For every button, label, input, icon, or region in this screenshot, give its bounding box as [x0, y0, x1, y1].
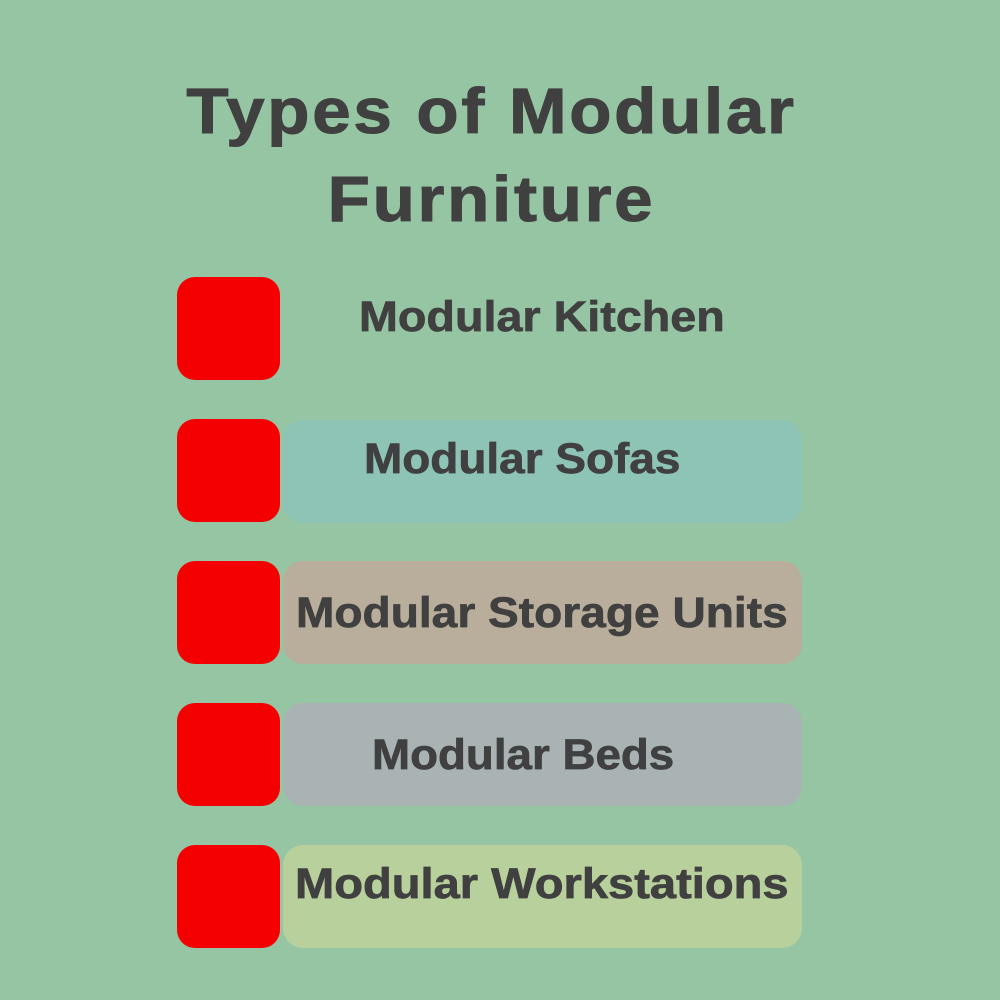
title: Types of Modular [186, 75, 797, 147]
row: Modular Workstations [177, 845, 802, 948]
row: Modular Sofas [177, 419, 802, 523]
row: Modular Beds [177, 703, 802, 806]
icon: red square 5 [177, 845, 280, 948]
row: Modular Kitchen [177, 277, 725, 380]
row: Modular Storage Units [177, 561, 802, 664]
bar: light green [283, 845, 802, 948]
bar: grey [283, 703, 802, 806]
label: Modular Beds: Modular Beds [372, 731, 674, 779]
bar: tan [283, 561, 802, 664]
label: Modular Kitchen: Modular Kitchen [359, 293, 725, 341]
title [186, 75, 797, 235]
label: Modular Storage Units: Modular Storage Units [296, 589, 788, 637]
icon: red square 1 [177, 277, 280, 380]
icon: red square 2 [177, 419, 280, 522]
label: Modular Sofas: Modular Sofas [364, 435, 680, 483]
icon: red square 4 [177, 703, 280, 806]
title: Furniture [328, 163, 655, 235]
label: Modular Workstations: Modular Workstations [295, 860, 789, 908]
bar: teal [283, 420, 802, 523]
icon: red square 3 [177, 561, 280, 664]
